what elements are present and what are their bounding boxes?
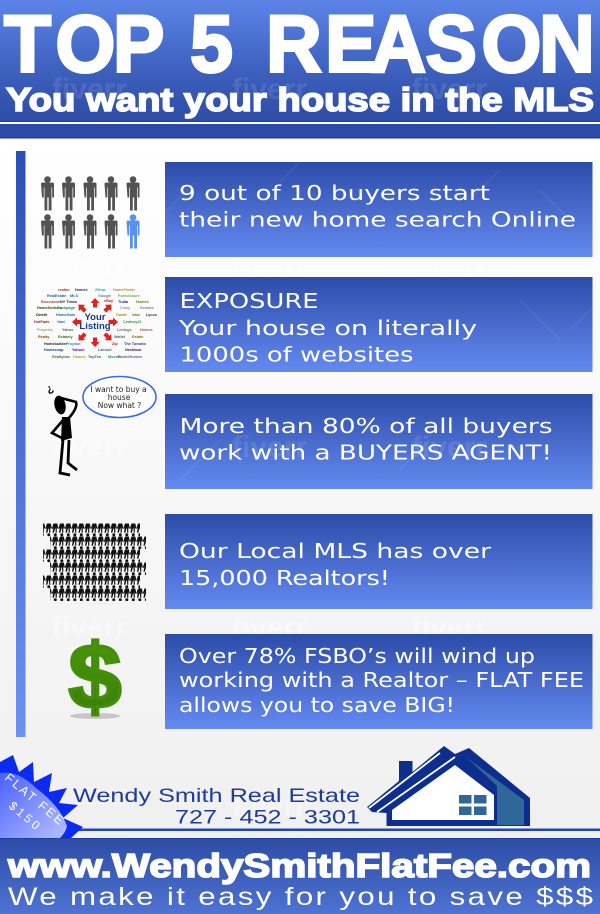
panel: exposure: EXPOSURE	[180, 289, 318, 313]
icon: your listing website cloud: Lamudi	[98, 348, 112, 352]
red arrows	[72, 298, 118, 347]
window	[459, 795, 486, 815]
icon: your listing website cloud: HomeFinder	[113, 288, 136, 292]
icon: your listing website cloud: Yahoo!	[72, 348, 85, 352]
fiverr watermarks on background	[52, 250, 487, 823]
tagline: We make it easy for you to save $$$	[8, 882, 593, 910]
fiverr watermarks on background: fiverr	[232, 250, 307, 283]
fiverr watermarks on background: fiverr	[52, 250, 127, 283]
fiverr watermarks on background: fiverr	[232, 611, 307, 644]
panel: exposure	[165, 277, 592, 372]
icon: your listing website cloud	[34, 288, 157, 359]
icon: your listing website cloud: Movoto	[108, 355, 122, 359]
speech bubble: Now what ?	[98, 401, 141, 410]
panel: FSBO: working with a Realtor – FLAT FEE	[179, 668, 584, 692]
icon: confused stick figure	[44, 382, 77, 475]
icon: your listing website cloud: Listing	[79, 321, 111, 332]
speech bubble: I want to buy a	[90, 385, 147, 394]
icon: your listing website cloud: Point2Homes	[118, 355, 142, 359]
panel: buyers agent: fiverr	[232, 431, 307, 464]
icon: your listing website cloud: Homes	[75, 288, 88, 292]
panel: local MLS: 15,000 Realtors!	[179, 566, 390, 590]
page background	[0, 139, 600, 839]
icon: your listing website cloud: Estate	[132, 335, 143, 339]
panel: FSBO: allows you to save BIG!	[179, 693, 455, 717]
panel: local MLS: Our Local MLS has over	[179, 539, 492, 563]
icon: your listing website cloud: Vast	[132, 313, 141, 317]
header banner: fiverr	[232, 73, 307, 106]
icon: your listing website cloud: Backpage	[57, 306, 75, 310]
icon: your listing website cloud: Yahoo	[62, 328, 74, 332]
vertical timeline bar	[16, 151, 26, 737]
icon: your listing website cloud: Craig	[120, 306, 130, 310]
panel: local MLS	[165, 514, 592, 609]
icon: your listing website cloud: Vast	[57, 320, 66, 324]
contact: company name and phone	[73, 785, 360, 828]
panel: buyers agent: More than 80% of all buyers	[180, 414, 552, 438]
header banner	[0, 0, 600, 138]
icon: your listing website cloud: Estately	[58, 335, 73, 339]
header banner: fiverr	[412, 73, 487, 106]
icon: your listing website cloud: Dwellr	[36, 313, 48, 317]
icon: your listing website cloud: Foreclosure	[118, 294, 140, 298]
icon: your listing website cloud: Your	[85, 312, 106, 323]
contact: company name and phone: Wendy Smith Real Estate	[73, 785, 360, 807]
title: TOP 5 REASON	[4, 0, 595, 89]
icon: your listing website cloud: Wallst	[114, 335, 126, 339]
fiverr watermarks on background: fiverr	[412, 250, 487, 283]
divider above footer	[60, 828, 600, 831]
icon: your listing website cloud: Nextdoor	[125, 348, 142, 352]
fiverr watermarks on background: fiverr	[52, 611, 127, 644]
badge: flat fee	[0, 755, 83, 838]
panel: online search: 9 out of 10 buyers start	[179, 181, 490, 205]
panel: FSBO	[165, 634, 592, 729]
icon: your listing website cloud: Lycos	[146, 313, 157, 317]
icon: your listing website cloud: Boomtown	[41, 300, 61, 304]
icon: your listing website cloud: Google	[98, 294, 111, 298]
icon: your listing website cloud: eBay	[104, 299, 114, 303]
icon: your listing website cloud: Homes	[136, 300, 149, 304]
icon: your listing website cloud: Zip	[112, 342, 118, 346]
website url: www.WendySmithFlatFee.com	[7, 847, 591, 884]
subtitle: You want your house in the MLS	[6, 81, 594, 118]
panel watermark diagonals	[165, 162, 592, 480]
icon: your listing website cloud: Zillow	[95, 288, 106, 292]
panel: exposure: 1000s of websites	[180, 342, 414, 366]
icon: your listing website cloud: Realtytrac	[52, 355, 70, 359]
icon: confused stick figure: ¿	[44, 382, 56, 396]
icon: your listing website cloud: Homebuilder	[44, 342, 68, 346]
icon: your listing website cloud: Property	[37, 328, 54, 332]
panel: FSBO: Over 78% FSBO’s will wind up	[179, 644, 535, 668]
speech bubble	[83, 376, 156, 418]
icon: your listing website cloud: Realty	[38, 335, 50, 339]
panel: exposure: Your house on literally	[178, 316, 477, 340]
fiverr watermarks on background: fiverr	[412, 790, 487, 823]
icon: your listing website cloud: Homes	[140, 328, 153, 332]
panel: buyers agent	[165, 394, 592, 489]
icon: your listing website cloud: realtor	[58, 288, 70, 292]
fiverr watermarks on background: fiverr	[232, 790, 307, 823]
icon: your listing website cloud: HomeGain	[56, 313, 76, 317]
icon: your listing website cloud: TopTen	[88, 355, 102, 359]
panel: buyers agent: fiverr	[412, 431, 487, 464]
panel: online search	[165, 162, 592, 257]
icon: your listing website cloud: Listings	[117, 328, 132, 332]
icon: your listing website cloud: Trulia	[118, 300, 129, 304]
icon: your listing website cloud: NY Times	[60, 300, 77, 304]
icon: crowd of realtors	[43, 524, 146, 601]
icon: your listing website cloud: Oodle	[116, 313, 127, 317]
header banner: fiverr	[52, 73, 127, 106]
icon: house logo	[367, 746, 530, 826]
footer banner	[0, 838, 600, 914]
icon: green dollar sign: $	[68, 625, 122, 728]
icon: your listing website cloud: Homesnap	[44, 348, 64, 352]
fiverr watermarks on background: fiverr	[412, 611, 487, 644]
icon: your listing website cloud: The Toronto	[124, 342, 147, 346]
icon: your listing website cloud: HomeSeekers	[37, 306, 62, 310]
icon: ten people, one highlighted	[41, 176, 140, 248]
contact: company name and phone: 727 - 452 - 3301	[175, 806, 360, 828]
icon: your listing website cloud: Propbot	[66, 342, 81, 346]
badge: flat fee: FLAT FEE	[2, 771, 66, 828]
speech bubble: house	[108, 393, 131, 402]
panel: online search: their new home search Online	[179, 208, 576, 232]
icon: your listing website cloud: Century21	[123, 320, 142, 324]
badge: flat fee: $150	[6, 799, 43, 833]
icon: your listing website cloud: Homes	[73, 355, 86, 359]
panel: buyers agent: work with a BUYERS AGENT!	[179, 440, 552, 464]
icon: your listing website cloud: HotPads	[34, 320, 49, 324]
icon: your listing website cloud: MLS	[70, 294, 78, 298]
icon: your listing website cloud: Rentals	[140, 306, 154, 310]
icon: your listing website cloud: RealEstate	[47, 294, 66, 298]
fiverr watermarks on background: fiverr	[52, 430, 127, 463]
